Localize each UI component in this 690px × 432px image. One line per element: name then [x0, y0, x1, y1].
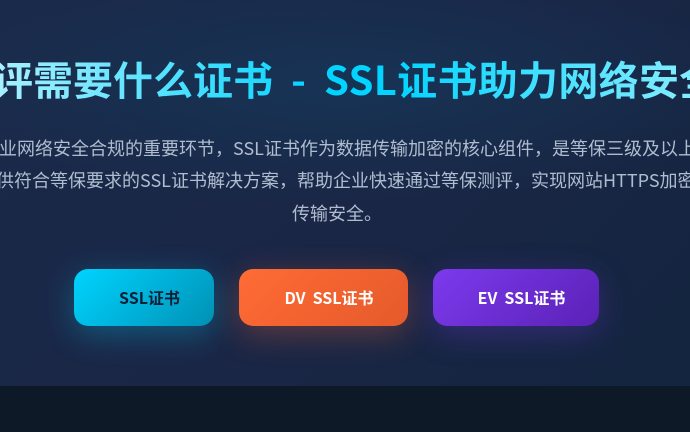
button: DV SSL certificate	[239, 269, 408, 326]
button: EV SSL certificate	[433, 269, 599, 326]
button: SSL certificate: SSL证书	[119, 285, 180, 309]
button: EV SSL certificate: EV SSL证书	[478, 285, 565, 309]
description line 3: 传输安全。	[292, 200, 382, 226]
bottom band	[0, 386, 690, 432]
button: DV SSL certificate: DV SSL证书	[284, 285, 374, 309]
button: SSL certificate	[74, 269, 214, 326]
